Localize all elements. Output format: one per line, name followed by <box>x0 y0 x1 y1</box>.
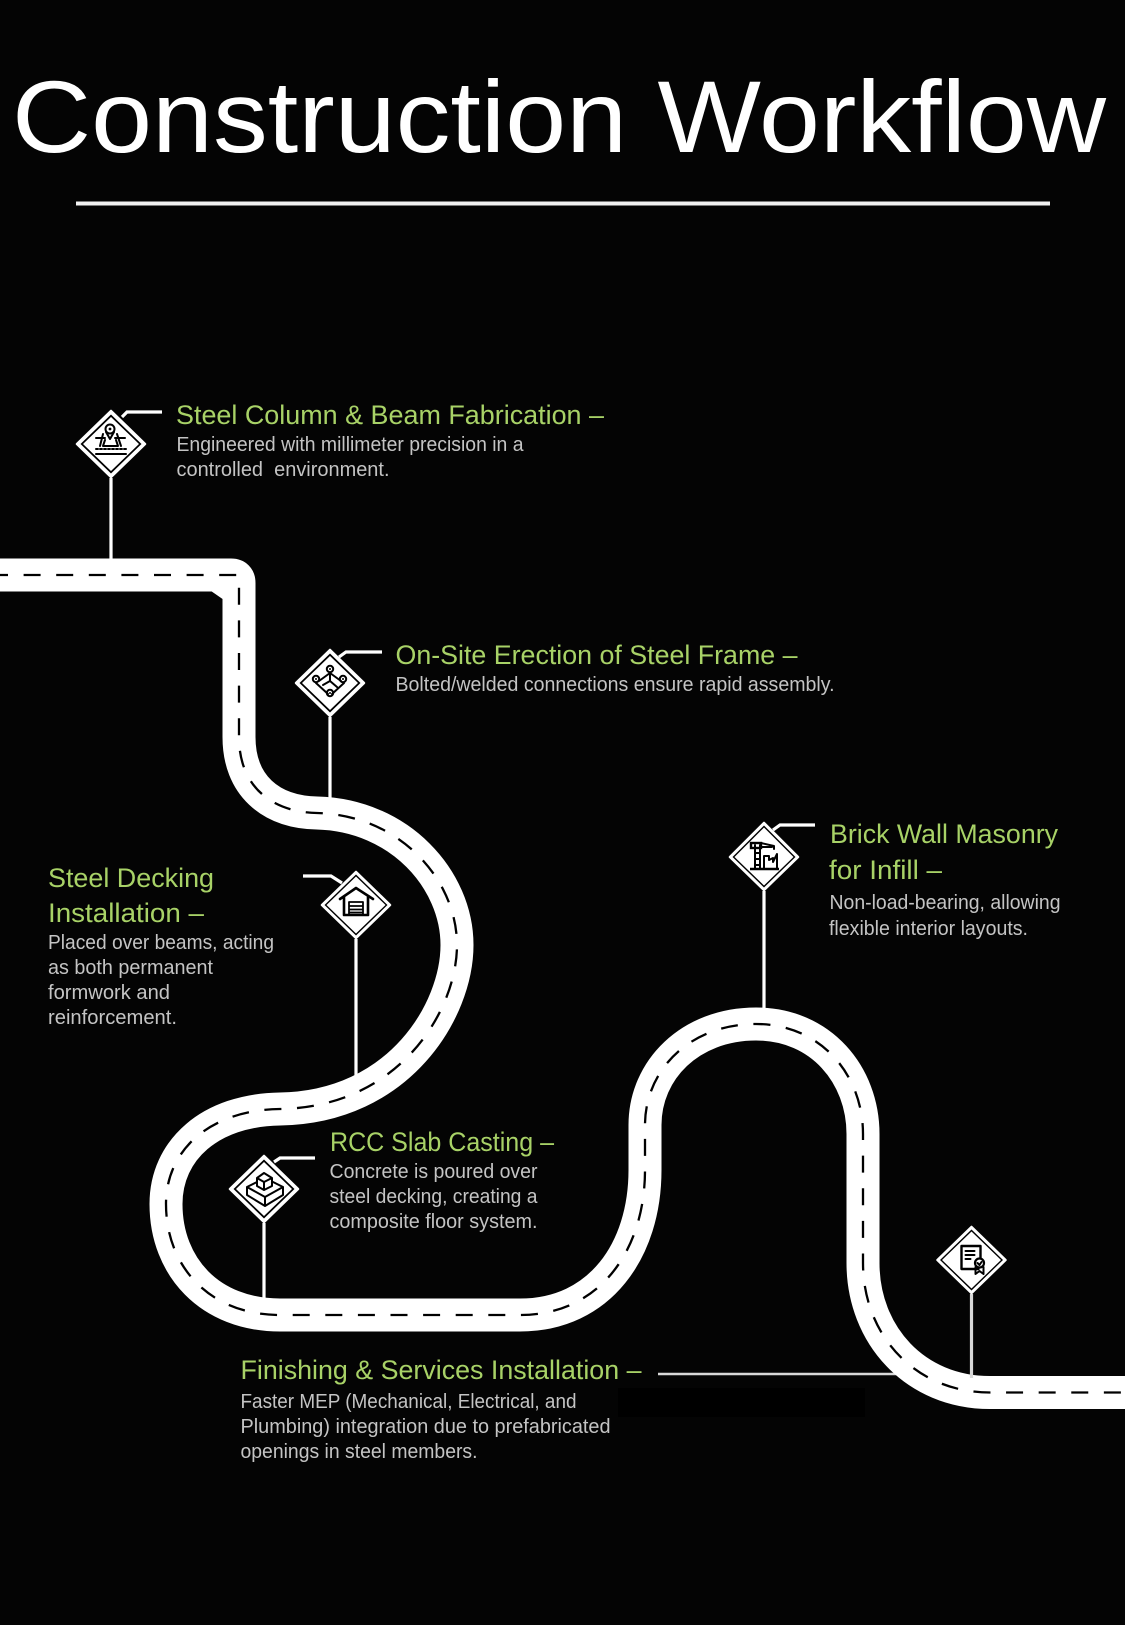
step 3 description: as both permanent <box>48 956 213 979</box>
icon: garage house <box>340 888 373 915</box>
step 4 description: Concrete is poured over <box>330 1160 538 1183</box>
step 3 description: formwork and <box>48 981 170 1004</box>
icon: stacked boxes <box>247 1173 283 1206</box>
connector line: finishing step <box>658 1373 900 1375</box>
signpost 4 <box>230 1156 315 1300</box>
winding road <box>0 575 1125 1392</box>
step 4 description <box>330 1160 538 1233</box>
step 4 description: steel decking, creating a <box>330 1185 538 1208</box>
step 6 description: openings in steel members. <box>240 1440 478 1463</box>
step 5 heading <box>829 819 1058 885</box>
step 6: finishing and services <box>240 1227 1006 1463</box>
icon: road with location pin <box>96 424 126 454</box>
step 6 heading: Finishing & Services Installation – <box>240 1355 642 1385</box>
step 1 description: Engineered with millimeter precision in a <box>176 433 524 456</box>
step 3 heading <box>48 863 214 928</box>
step 5 description: Non-load-bearing, allowing <box>830 891 1060 914</box>
step 1 description: controlled environment. <box>176 458 390 481</box>
step 5 heading: Brick Wall Masonry <box>830 819 1058 849</box>
title: Construction Workflow <box>12 60 1106 174</box>
step 2 description: Bolted/welded connections ensure rapid assembly. <box>396 673 834 696</box>
step 3 heading: Installation – <box>48 898 204 928</box>
signpost 2 <box>296 650 382 799</box>
step 3 heading: Steel Decking <box>48 863 214 893</box>
step 3 description: reinforcement. <box>48 1006 177 1029</box>
step 1 description <box>176 433 524 481</box>
signpost 6 <box>938 1227 1006 1378</box>
step 3 description: Placed over beams, acting <box>48 931 274 954</box>
step 6 description: Faster MEP (Mechanical, Electrical, and <box>240 1390 576 1413</box>
icon: site plan with markers <box>313 666 346 696</box>
signpost 3 <box>303 872 390 1082</box>
step 5: brick wall masonry <box>730 819 1060 1010</box>
step 2: on-site erection of steel frame <box>296 640 834 799</box>
step 4: RCC slab casting <box>230 1127 554 1300</box>
signpost 1 <box>77 411 162 560</box>
step 6 description: Plumbing) integration due to prefabricated <box>240 1415 610 1438</box>
step 5 heading: for Infill – <box>829 855 942 885</box>
icon: crane and factory <box>750 843 779 869</box>
step 3: steel decking installation <box>48 863 390 1082</box>
step 2 heading: On-Site Erection of Steel Frame – <box>396 640 798 670</box>
step 1 heading: Steel Column & Beam Fabrication – <box>176 400 604 430</box>
step 5 description: flexible interior layouts. <box>829 917 1028 940</box>
step 4 heading: RCC Slab Casting – <box>330 1127 554 1157</box>
step 1: steel column and beam fabrication <box>77 400 604 560</box>
step 4 description: composite floor system. <box>330 1210 538 1233</box>
step 6 description <box>240 1390 610 1463</box>
step 3 description <box>48 931 274 1029</box>
signpost 5 <box>730 823 815 1010</box>
icon: certificate with badge <box>962 1246 984 1274</box>
title underline <box>76 202 1050 206</box>
step 5 description <box>829 891 1060 940</box>
